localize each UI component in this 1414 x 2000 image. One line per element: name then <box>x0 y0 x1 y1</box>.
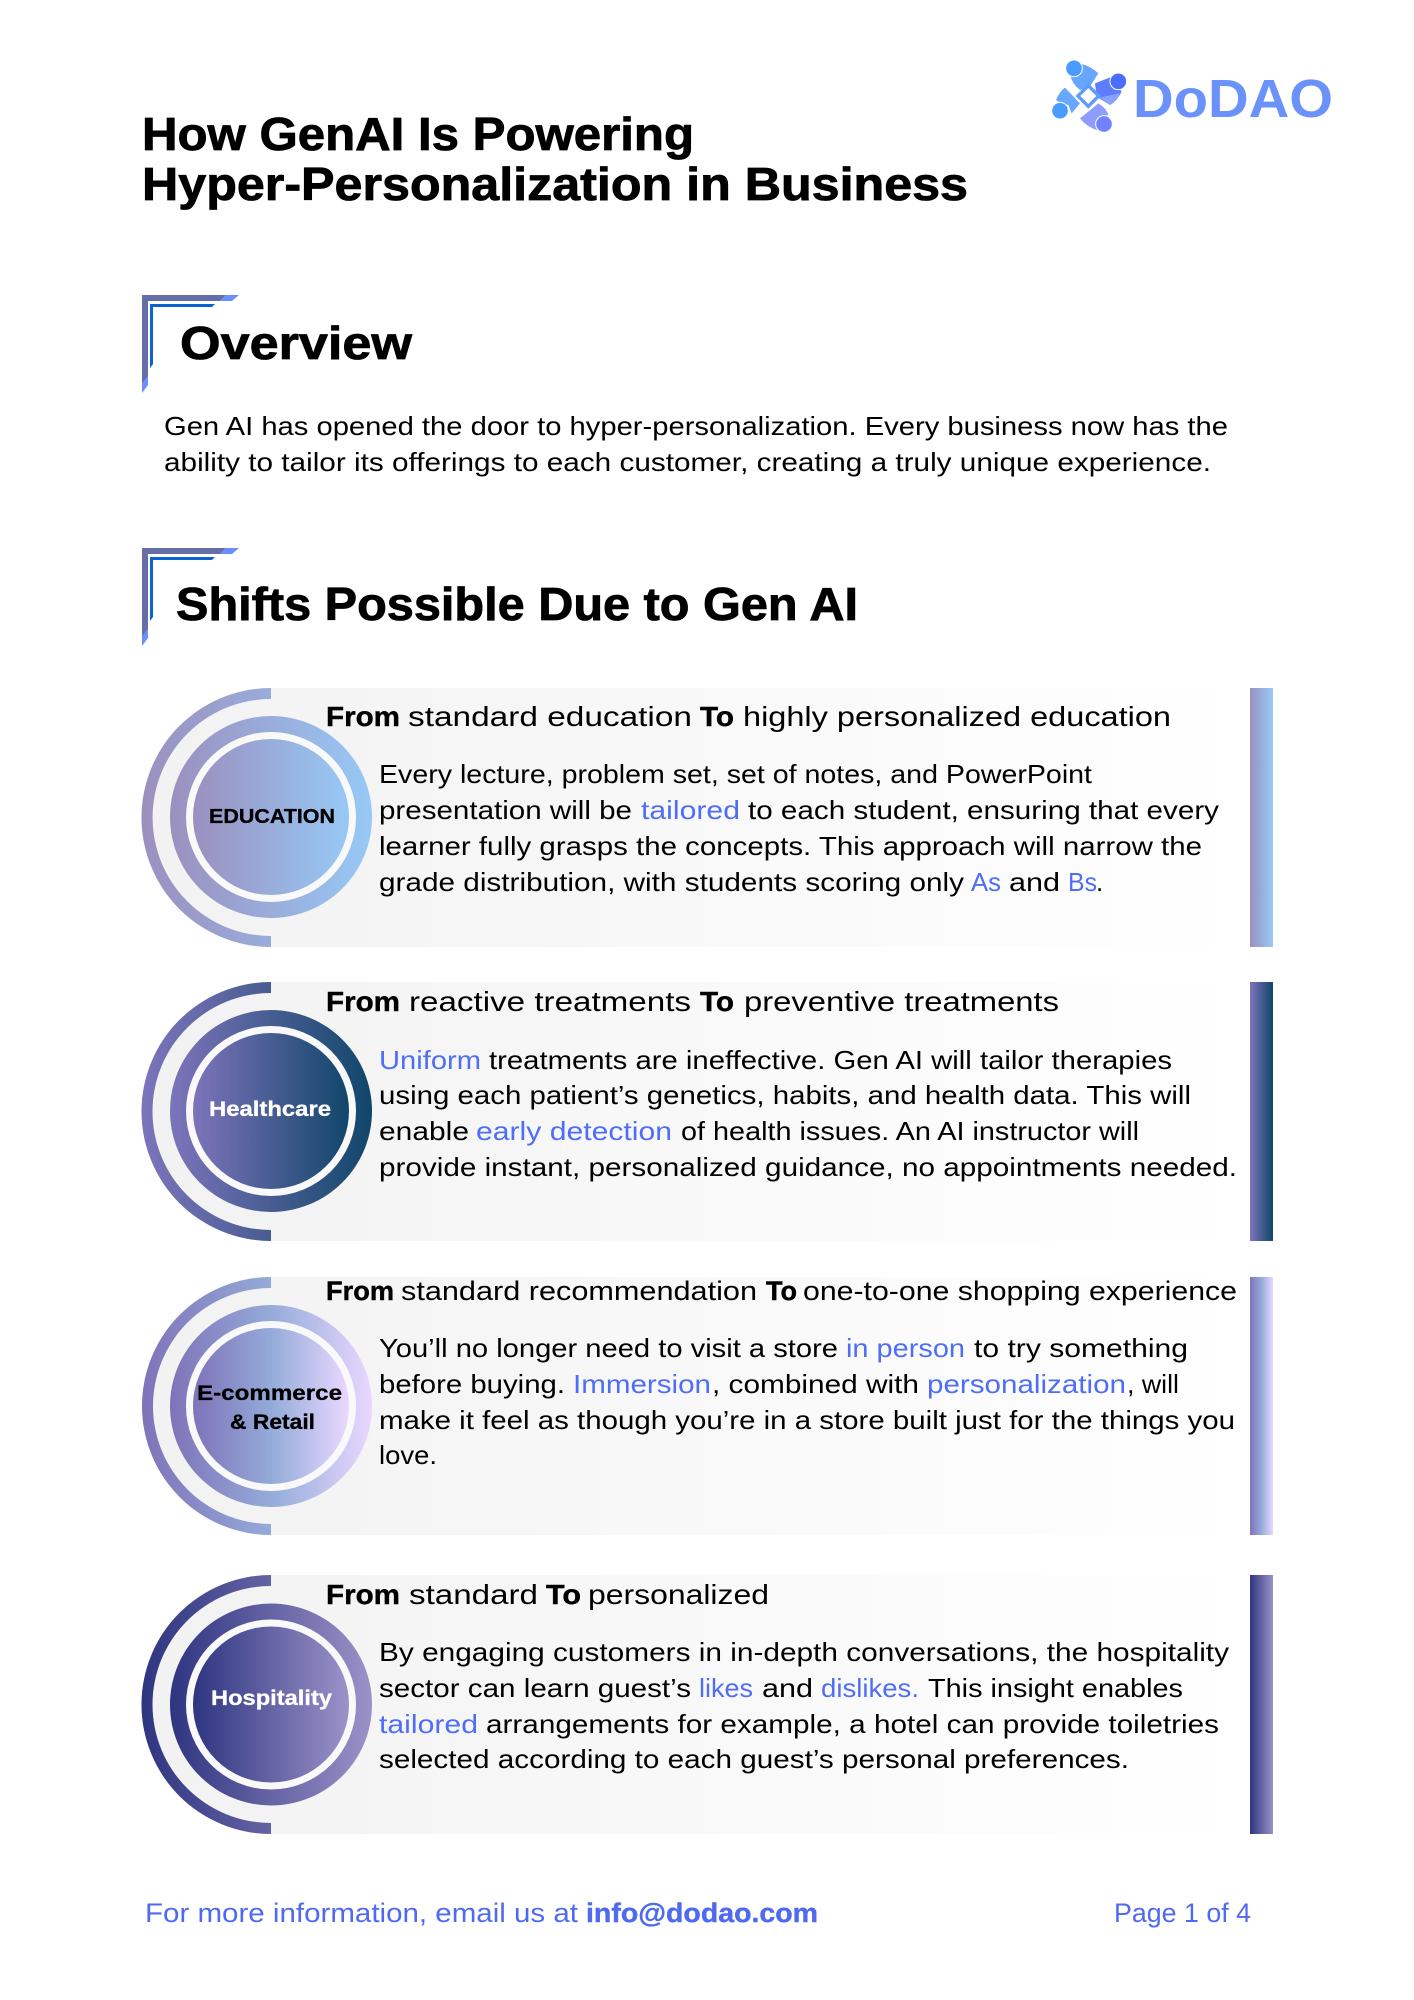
panel: e-commerce and retail <box>142 1276 1273 1535</box>
body text: Bs <box>1068 867 1097 897</box>
body text: sector can learn guest’s <box>379 1673 691 1703</box>
icon: four people around a table <box>1052 60 1127 132</box>
panel: hospitality <box>141 1575 1273 1834</box>
body text: , combined with <box>712 1369 919 1399</box>
circle badge <box>141 688 372 947</box>
shift headline <box>326 986 1059 1017</box>
body text <box>379 759 1219 897</box>
circle badge <box>141 982 372 1241</box>
body text <box>379 1637 1229 1774</box>
body text: tailored <box>641 795 740 825</box>
card background <box>141 982 1250 1241</box>
shift headline: From <box>326 1579 400 1610</box>
body text <box>379 1333 1235 1470</box>
title: How GenAI Is Powering <box>142 108 694 160</box>
body text: This insight enables <box>928 1673 1183 1703</box>
panel: education <box>141 688 1273 947</box>
shift headline: preventive treatments <box>744 986 1059 1017</box>
body text: likes <box>699 1673 753 1703</box>
footer <box>145 1898 1251 1928</box>
shift headline: From <box>326 986 400 1017</box>
circle badge: E-commerce <box>197 1382 342 1405</box>
body text: grade distribution, with students scoring only <box>379 867 964 897</box>
body text: tailored <box>379 1709 478 1739</box>
shift headline: highly personalized education <box>743 701 1171 732</box>
shift headline: one-to-one shopping experience <box>803 1276 1237 1306</box>
body text: and <box>762 1673 813 1703</box>
side bar <box>1250 1575 1273 1834</box>
logo: DoDAO <box>1052 60 1333 132</box>
body text: treatments are ineffective. Gen AI will tailor therapies <box>489 1045 1172 1075</box>
body text: before buying. <box>379 1369 565 1399</box>
contact line <box>145 1898 818 1928</box>
circle badge: Healthcare <box>209 1098 331 1121</box>
shift headline: To <box>700 701 734 732</box>
overview text <box>164 411 1228 477</box>
circle badge: & Retail <box>230 1411 315 1434</box>
shift headline: standard education <box>408 701 692 732</box>
shift headline <box>326 701 1171 732</box>
logo wordmark: DoDAO <box>1133 69 1333 129</box>
body text: You’ll no longer need to visit a store <box>379 1333 838 1363</box>
section heading: Shifts <box>142 548 858 646</box>
title: Hyper-Personalization in Business <box>142 158 968 210</box>
circle badge <box>141 1575 372 1834</box>
shift headline: To <box>700 986 734 1017</box>
body text: to each student, ensuring that every <box>748 795 1219 825</box>
shift headline: From <box>326 1276 394 1306</box>
body text: enable <box>379 1116 469 1146</box>
body text: selected according to each guest’s personal preferences. <box>379 1744 1129 1774</box>
body text: personalization <box>927 1369 1126 1399</box>
body text: and <box>1009 867 1060 897</box>
body text: dislikes. <box>821 1673 919 1703</box>
body text: arrangements for example, a hotel can provide toiletries <box>486 1709 1219 1739</box>
shift headline: From <box>326 701 400 732</box>
page number: Page 1 of 4 <box>1114 1898 1251 1928</box>
circle badge: Hospitality <box>211 1687 332 1710</box>
body text: As <box>971 867 1001 897</box>
shift headline: standard <box>409 1579 538 1610</box>
icon: bracket <box>142 295 239 393</box>
section heading: Overview <box>142 295 412 393</box>
shift headline: To <box>766 1276 797 1306</box>
heading text: Overview <box>180 317 412 369</box>
body text: to try something <box>974 1333 1188 1363</box>
body text: using each patient’s genetics, habits, and health data. This will <box>379 1080 1191 1110</box>
card background <box>141 688 1250 947</box>
shift headline: standard recommendation <box>401 1276 757 1306</box>
contact line: info@dodao.com <box>586 1898 818 1928</box>
side bar <box>1250 1277 1273 1535</box>
overview text: ability to tailor its offerings to each customer, creating a truly unique experience. <box>164 447 1211 477</box>
card background <box>142 1277 1250 1535</box>
panel: healthcare <box>141 982 1273 1241</box>
body text: Every lecture, problem set, set of notes, and PowerPoint <box>379 759 1093 789</box>
body text: Uniform <box>379 1045 481 1075</box>
body text: of health issues. An AI instructor will <box>681 1116 1139 1146</box>
heading text: Shifts Possible Due to Gen AI <box>176 578 858 630</box>
body text <box>379 1045 1237 1182</box>
shift headline <box>326 1276 1237 1306</box>
body text: love. <box>379 1440 437 1470</box>
circle badge <box>142 1277 372 1535</box>
side bar <box>1250 688 1273 947</box>
shift headline: To <box>546 1579 581 1610</box>
contact line: For more information, email us at <box>145 1898 579 1928</box>
body text: early detection <box>476 1116 672 1146</box>
title <box>142 108 968 210</box>
body text: By engaging customers in in-depth conversations, the hospitality <box>379 1637 1229 1667</box>
body text: in person <box>846 1333 965 1363</box>
body text: , will <box>1127 1369 1179 1399</box>
icon: bracket <box>142 548 239 646</box>
card background <box>141 1575 1250 1834</box>
overview text: Gen AI has opened the door to hyper-personalization. Every business now has the <box>164 411 1228 441</box>
body text: learner fully grasps the concepts. This approach will narrow the <box>379 831 1202 861</box>
body text: Immersion <box>573 1369 711 1399</box>
body text: provide instant, personalized guidance, no appointments needed. <box>379 1152 1237 1182</box>
shift headline: personalized <box>588 1579 769 1610</box>
body text: make it feel as though you’re in a store built just for the things you <box>379 1405 1235 1435</box>
side bar <box>1250 982 1273 1241</box>
circle badge: EDUCATION <box>209 806 335 828</box>
body text: . <box>1096 867 1103 897</box>
shift headline: reactive treatments <box>409 986 691 1017</box>
shift headline <box>326 1579 769 1610</box>
body text: presentation will be <box>379 795 632 825</box>
